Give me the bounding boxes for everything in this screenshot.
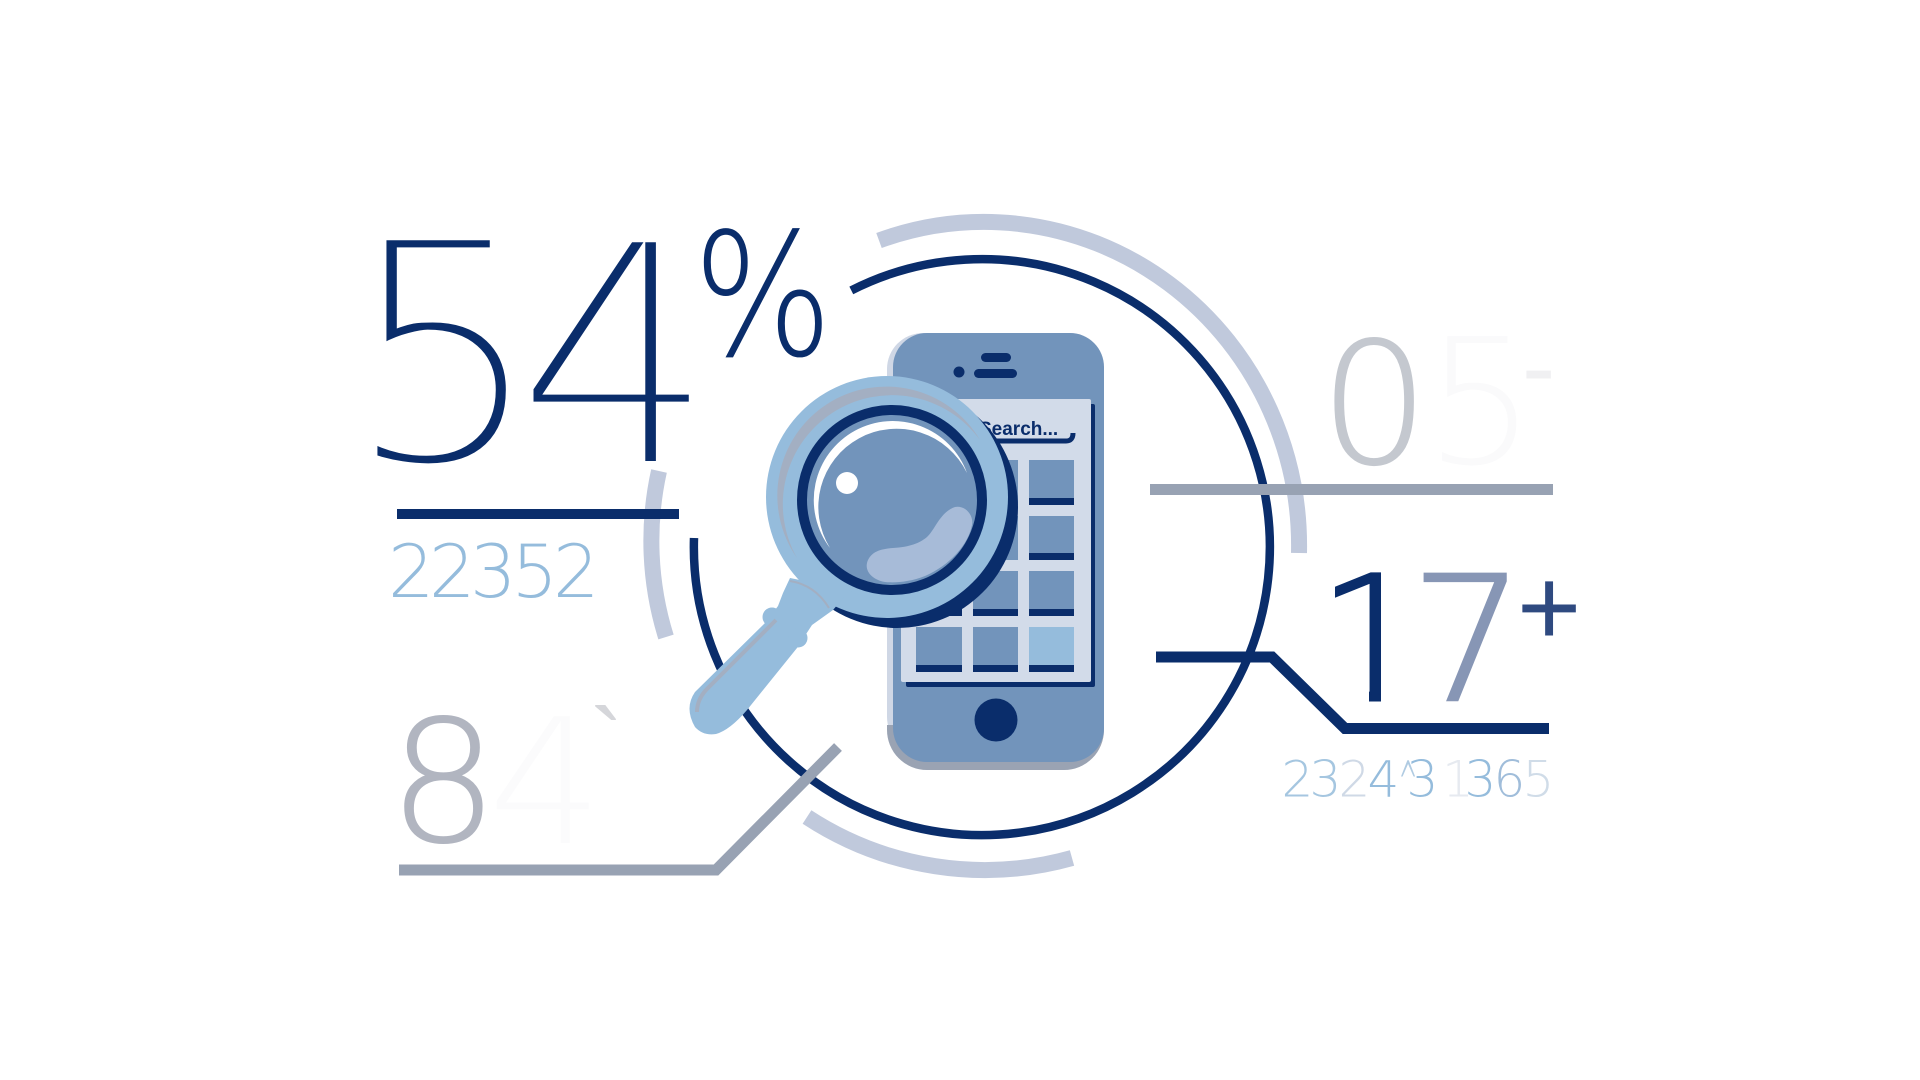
statistic: 54%: 5 xyxy=(344,177,543,535)
statistic: 17+: 7 xyxy=(1410,539,1526,741)
statistic: faded 84` xyxy=(389,681,623,884)
statistic: 54% xyxy=(344,177,833,536)
screen xyxy=(901,399,1091,682)
statistic: 17+: + xyxy=(1517,546,1581,669)
statistic: 54%: 4 xyxy=(516,180,717,536)
sub-number: 2324^31365: 5 xyxy=(1522,750,1554,808)
handle shading xyxy=(697,581,829,712)
lens xyxy=(802,410,982,590)
sub-number: 2324^31365: 2 xyxy=(1338,750,1370,808)
statistic: 17+: 1 xyxy=(1318,539,1428,741)
outer light ring segments xyxy=(651,222,1299,870)
screen shadow xyxy=(906,404,1095,687)
phone edge highlight xyxy=(887,333,1104,753)
speaker and camera xyxy=(954,353,1017,378)
statistic: faded 05-: 0 xyxy=(1320,308,1429,504)
rim shadow xyxy=(776,386,1018,628)
leader line: 17+ xyxy=(1156,657,1549,728)
statistic: 54%: % xyxy=(693,196,833,396)
statistic: faded 84`: ` xyxy=(590,689,623,801)
sub-number: 2324^31365: 1 xyxy=(1442,750,1474,808)
sub-number: 2324^31365: 2 xyxy=(1282,750,1313,808)
search field: Search... xyxy=(979,419,1058,440)
lens reflection xyxy=(867,507,972,582)
phone body xyxy=(893,333,1104,762)
home button xyxy=(974,698,1018,742)
lens glare xyxy=(814,421,967,548)
icon: magnifying glass xyxy=(690,376,1018,734)
statistic: faded 84`: 4 xyxy=(488,681,603,884)
sub-number: 2324^31365 xyxy=(1282,749,1554,818)
sub-number: 2324^31365: 3 xyxy=(1310,750,1341,808)
rim shading xyxy=(777,387,980,558)
sub-number: 2324^31365: 6 xyxy=(1494,750,1525,808)
statistic: faded 84`: 8 xyxy=(389,686,498,882)
statistic: faded 05- xyxy=(1320,302,1555,505)
underline: 05 xyxy=(1150,484,1553,495)
sub-number: 2324^31365: 3 xyxy=(1406,750,1438,808)
sub-number: 22352: 22352 xyxy=(388,530,599,615)
app tile grid xyxy=(916,460,1074,672)
underline: 54% xyxy=(397,509,679,519)
sub-number: 2324^31365: ^ xyxy=(1398,749,1418,818)
statistic: faded 05-: 5 xyxy=(1425,302,1536,505)
navy ring xyxy=(694,259,1270,835)
rim xyxy=(766,376,1008,618)
lens highlight dot xyxy=(836,472,858,494)
sub-number: 2324^31365: 3 xyxy=(1464,750,1496,808)
statistic: faded 05-: - xyxy=(1522,311,1555,423)
leader line: 84 xyxy=(399,747,838,870)
icon: smartphone xyxy=(887,333,1104,770)
statistic: 17+ xyxy=(1315,539,1581,741)
lens rim re-fill xyxy=(792,400,992,600)
handle xyxy=(690,578,850,734)
sub-number: 2324^31365: 4 xyxy=(1368,750,1399,808)
phone bottom shadow xyxy=(887,725,1104,770)
